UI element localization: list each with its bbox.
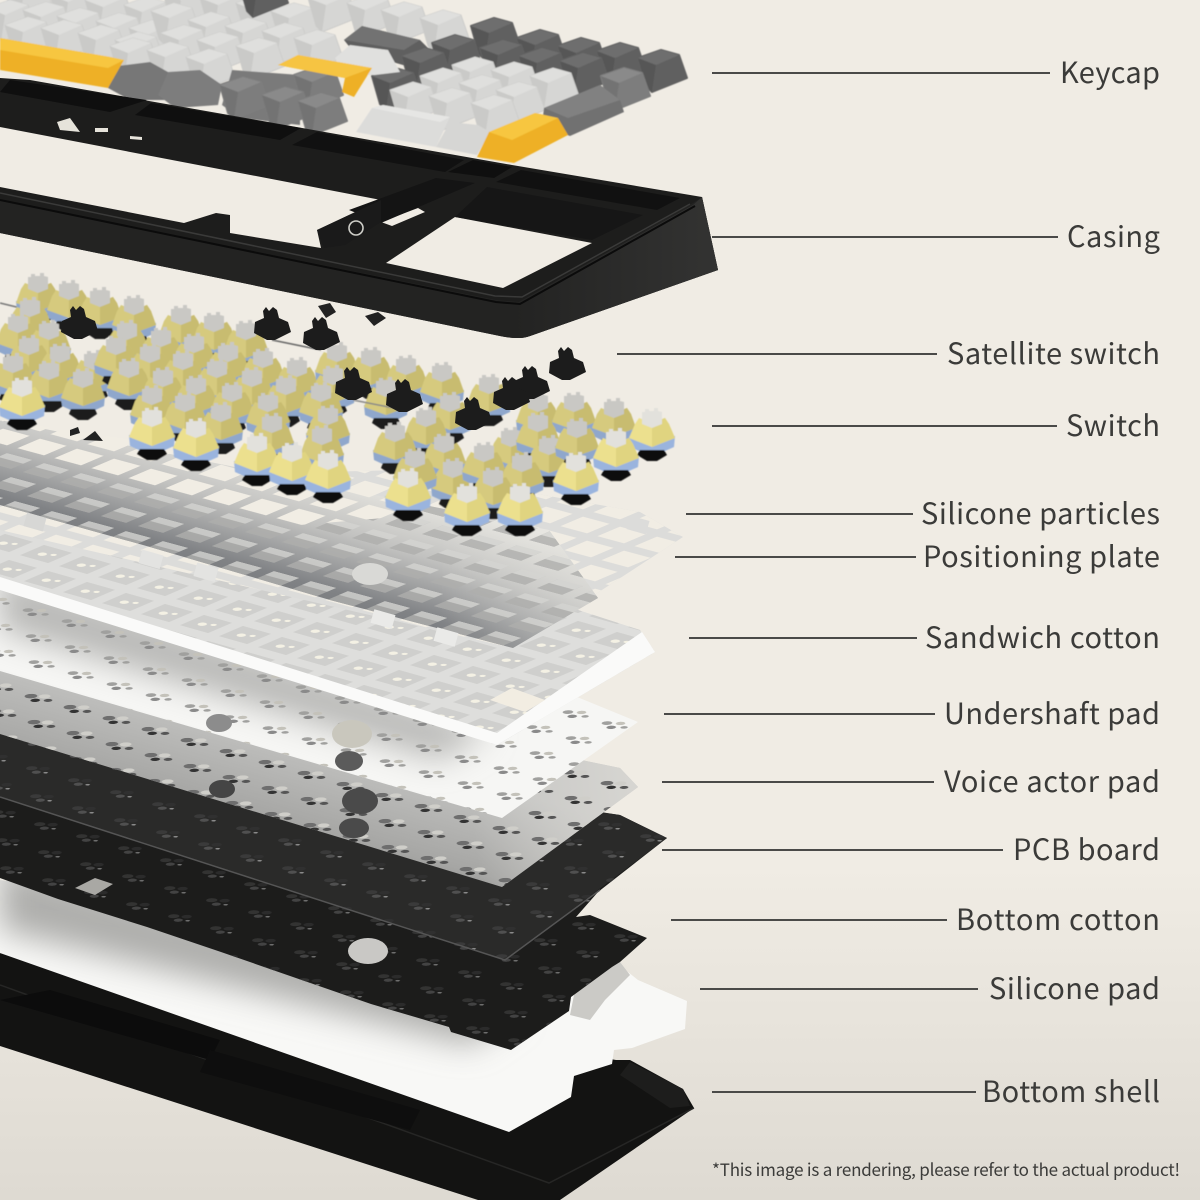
label: Switch: Switch xyxy=(1066,403,1160,445)
layer: keycaps xyxy=(0,0,687,163)
label: Undershaft pad: Undershaft pad xyxy=(944,691,1160,733)
layer: undershaft pad xyxy=(0,590,638,818)
label: Sandwich cotton: Sandwich cotton xyxy=(925,615,1160,657)
label: Positioning plate: Positioning plate xyxy=(923,534,1160,576)
layer: bottom shell xyxy=(0,953,694,1200)
label: PCB board: PCB board xyxy=(1013,827,1160,869)
layer: metal plate with silicone particles xyxy=(0,420,650,648)
label: Silicone particles: Silicone particles xyxy=(921,491,1160,533)
label: Voice actor pad: Voice actor pad xyxy=(944,759,1160,801)
label: Bottom cotton: Bottom cotton xyxy=(956,897,1160,939)
layer: voice actor pad xyxy=(0,640,638,887)
layer: casing xyxy=(0,78,718,338)
layer: sandwich cotton xyxy=(0,510,655,745)
footnote: *This image is a rendering, please refer to the actual product! xyxy=(712,1156,1180,1181)
label: Casing: Casing xyxy=(1067,214,1160,256)
layer: PCB board xyxy=(0,720,667,1050)
label: Satellite switch: Satellite switch xyxy=(947,331,1160,373)
label: Silicone pad: Silicone pad xyxy=(989,966,1160,1008)
layer: switches xyxy=(0,273,675,536)
label: Bottom shell: Bottom shell xyxy=(982,1069,1160,1111)
layer: bottom cotton xyxy=(570,962,630,1020)
layer: positioning plate xyxy=(0,470,683,648)
label: Keycap: Keycap xyxy=(1060,50,1160,92)
layer: satellite switches xyxy=(61,303,586,430)
layer: silicone pad xyxy=(0,860,687,1132)
